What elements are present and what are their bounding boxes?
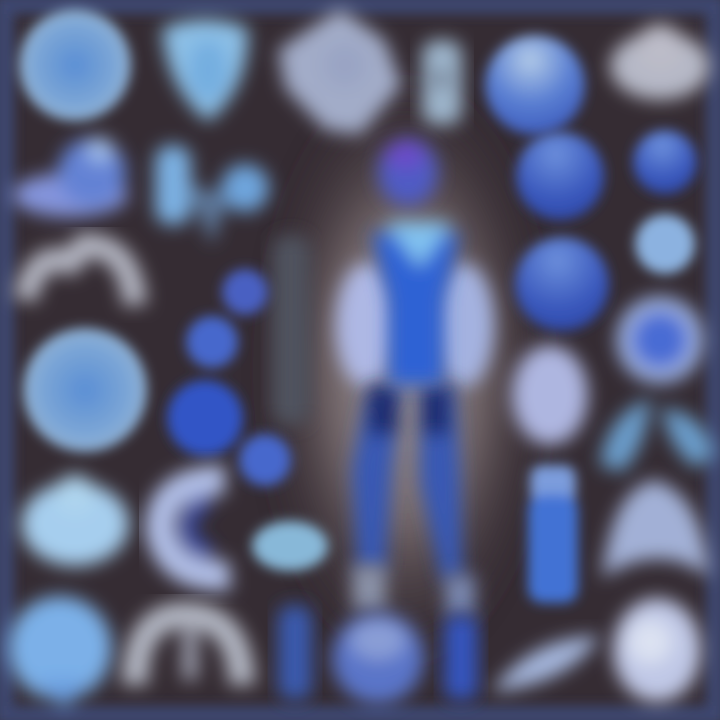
- icon: large blue sphere: [23, 328, 147, 452]
- icon: top left sphere: [19, 9, 131, 121]
- icon: deep blue sphere: [515, 237, 609, 331]
- icon: blue dome sphere: [485, 35, 585, 135]
- icon: crescent: [160, 480, 230, 575]
- icon: grey organ blob: [278, 8, 402, 135]
- icon: pale cloud: [610, 24, 710, 100]
- figure: torso: [372, 222, 460, 385]
- icon: pale arch right: [602, 480, 710, 578]
- icon: small sphere chain: [167, 269, 291, 486]
- central figure: [336, 138, 494, 615]
- icon: bottom arch: [135, 615, 242, 685]
- sphere 1: [222, 269, 268, 315]
- icon: two leaves: [600, 398, 716, 472]
- icon: left cloud shape: [12, 137, 128, 217]
- figure: feet: [352, 565, 475, 615]
- icon: pale blue blob: [21, 475, 129, 566]
- grey vertical bar: [272, 235, 310, 425]
- icon: grey arch: [25, 245, 135, 305]
- sphere 4: [239, 434, 291, 486]
- icon: sphere right row two: [516, 132, 604, 220]
- icon: pale white sphere: [613, 598, 701, 702]
- figure: arms: [336, 263, 494, 387]
- central glow: [260, 70, 550, 670]
- icon: small blue sphere: [633, 130, 697, 194]
- icon: flat ellipse: [252, 521, 328, 571]
- sphere 3: [167, 380, 243, 456]
- icon: branching light blue shape: [155, 145, 269, 245]
- icon: pale kidney: [512, 345, 588, 445]
- sphere 2: [186, 316, 238, 368]
- figure: head: [378, 138, 438, 206]
- icon: bottom left blob: [8, 596, 112, 710]
- icon: bottom column two: [444, 615, 478, 700]
- figure: legs: [352, 385, 462, 580]
- icon: ringed blue sphere: [616, 296, 704, 384]
- icon: blue column: [528, 465, 578, 603]
- icon: shield: [162, 19, 248, 122]
- icon: small light sphere: [635, 214, 695, 274]
- icon: bottom sphere: [332, 612, 424, 704]
- icon: bottom column one: [278, 605, 312, 700]
- icon: diagonal streak: [492, 636, 600, 692]
- icon: small pale figure: [422, 40, 462, 125]
